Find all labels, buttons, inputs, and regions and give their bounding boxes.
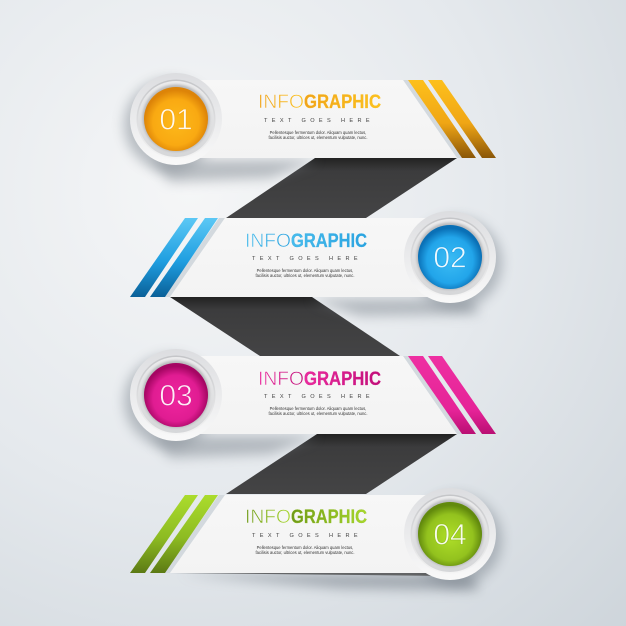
panel: step 01 bbox=[124, 73, 496, 182]
subheading 02: TEXT GOES HERE bbox=[252, 256, 362, 262]
heading 03 bbox=[258, 368, 381, 390]
connector: dark fold 1 bbox=[226, 158, 457, 218]
heading 04: GRAPHIC bbox=[291, 506, 367, 528]
stripes 02 bbox=[130, 218, 218, 297]
badge 03: 03 bbox=[159, 380, 193, 412]
badge 03 bbox=[130, 349, 222, 441]
subheading 03: TEXT GOES HERE bbox=[264, 394, 374, 400]
heading 01 bbox=[258, 91, 381, 113]
heading 04 bbox=[245, 506, 367, 528]
subheading 01: TEXT GOES HERE bbox=[264, 118, 374, 124]
badge 04 bbox=[404, 488, 496, 580]
heading 02: GRAPHIC bbox=[291, 230, 367, 252]
badge 04: 04 bbox=[433, 518, 467, 552]
band 03 bbox=[176, 356, 457, 434]
stripes 04 bbox=[130, 495, 218, 573]
body text 01: Pellentesque fermentum dolor. Aliquam quam lectus, bbox=[270, 130, 366, 135]
band 01 bbox=[176, 80, 457, 158]
heading 02 bbox=[245, 230, 367, 252]
body text 01: facilisis auctor, ultrices ut, elementum vulputate, nunc. bbox=[269, 135, 367, 140]
subheading 04: TEXT GOES HERE bbox=[252, 533, 362, 539]
band 02 bbox=[170, 218, 450, 297]
badge 01: 01 bbox=[159, 104, 193, 136]
heading 02: INFO bbox=[245, 230, 291, 252]
badge 02: 02 bbox=[433, 242, 467, 274]
stripes 01 bbox=[408, 80, 496, 158]
stripes 03 bbox=[408, 356, 496, 434]
connector: dark fold 3 bbox=[226, 434, 457, 494]
connector: dark fold 2 bbox=[170, 297, 400, 356]
panel: step 02 bbox=[130, 211, 502, 316]
badge 02 bbox=[404, 211, 496, 303]
heading 03: GRAPHIC bbox=[304, 368, 381, 390]
body text 01 bbox=[269, 130, 367, 140]
band 04 bbox=[170, 495, 450, 573]
body text 04 bbox=[256, 545, 354, 555]
heading 03: INFO bbox=[258, 368, 304, 390]
body text 02: Pellentesque fermentum dolor. Aliquam quam lectus, bbox=[257, 268, 353, 273]
body text 04: facilisis auctor, ultrices ut, elementum vulputate, nunc. bbox=[256, 550, 354, 555]
body text 03: facilisis auctor, ultrices ut, elementum vulputate, nunc. bbox=[269, 411, 367, 416]
heading 04: INFO bbox=[245, 506, 291, 528]
heading 01: INFO bbox=[258, 91, 304, 113]
body text 02 bbox=[256, 268, 354, 278]
badge 01 bbox=[130, 73, 222, 165]
body text 03: Pellentesque fermentum dolor. Aliquam quam lectus, bbox=[270, 406, 366, 411]
body text 04: Pellentesque fermentum dolor. Aliquam quam lectus, bbox=[257, 545, 353, 550]
heading 01: GRAPHIC bbox=[304, 91, 381, 113]
body text 03 bbox=[269, 406, 367, 416]
body text 02: facilisis auctor, ultrices ut, elementum vulputate, nunc. bbox=[256, 273, 354, 278]
panel: step 04 bbox=[130, 488, 502, 590]
panel: step 03 bbox=[124, 349, 496, 458]
